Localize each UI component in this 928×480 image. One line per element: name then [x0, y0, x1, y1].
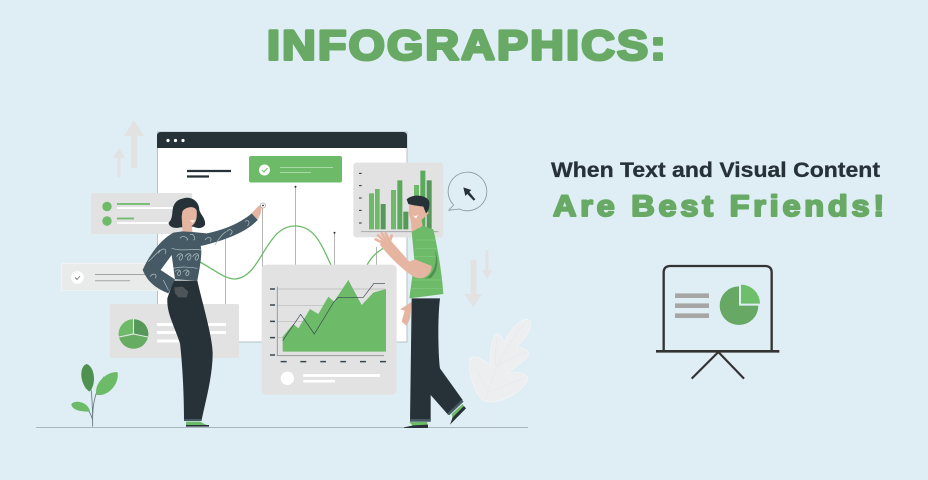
subtitle: first line: When Text and Visual Content	[551, 158, 880, 182]
window title bar	[157, 132, 407, 148]
line chart on window	[198, 186, 384, 307]
icon: speech bubble with cursor	[448, 172, 487, 211]
icon: presentation board with pie chart	[656, 266, 779, 379]
title: INFOGRAPHICS:	[267, 22, 668, 68]
card: pie chart and lines	[110, 304, 239, 358]
man cuffs	[410, 401, 463, 420]
card: check list	[62, 264, 160, 290]
icon: up arrows	[113, 120, 144, 177]
window dots	[166, 139, 185, 142]
icon: down arrows	[464, 250, 492, 307]
woman lower hand	[174, 287, 188, 297]
man lower body	[400, 298, 466, 428]
man shirt shadow	[425, 249, 437, 279]
card: area chart	[262, 265, 397, 395]
man upper body	[376, 196, 443, 298]
man smile	[413, 214, 419, 219]
woman sweater pattern	[148, 221, 249, 290]
woman sweater	[143, 213, 258, 293]
man shoes	[404, 404, 466, 428]
woman hair	[169, 198, 205, 228]
man hair	[407, 196, 429, 213]
woman legs and shoes	[167, 281, 213, 427]
man face and neck	[409, 203, 429, 232]
icon: green plant	[71, 364, 118, 427]
illustration: ground line	[36, 426, 528, 428]
woman smile	[189, 219, 195, 223]
man lower hand	[400, 302, 412, 326]
man fingers	[376, 233, 392, 243]
card: list with dots	[91, 193, 192, 234]
icon: leaf	[469, 319, 530, 427]
man trousers	[410, 298, 463, 422]
character: man	[376, 196, 466, 428]
man raised arm	[380, 240, 432, 278]
card: bar chart	[353, 163, 443, 237]
character: woman	[143, 198, 266, 427]
green check badge	[249, 156, 342, 182]
window heading lines	[187, 171, 231, 176]
woman hand	[252, 205, 262, 220]
woman face	[182, 207, 197, 233]
man shirt	[409, 226, 443, 298]
subtitle: second line: Are Best Friends!	[553, 190, 888, 223]
pointer dot	[260, 203, 266, 208]
woman upper body	[143, 198, 262, 297]
shirt stripes	[411, 240, 443, 288]
panel: browser window	[157, 132, 407, 342]
